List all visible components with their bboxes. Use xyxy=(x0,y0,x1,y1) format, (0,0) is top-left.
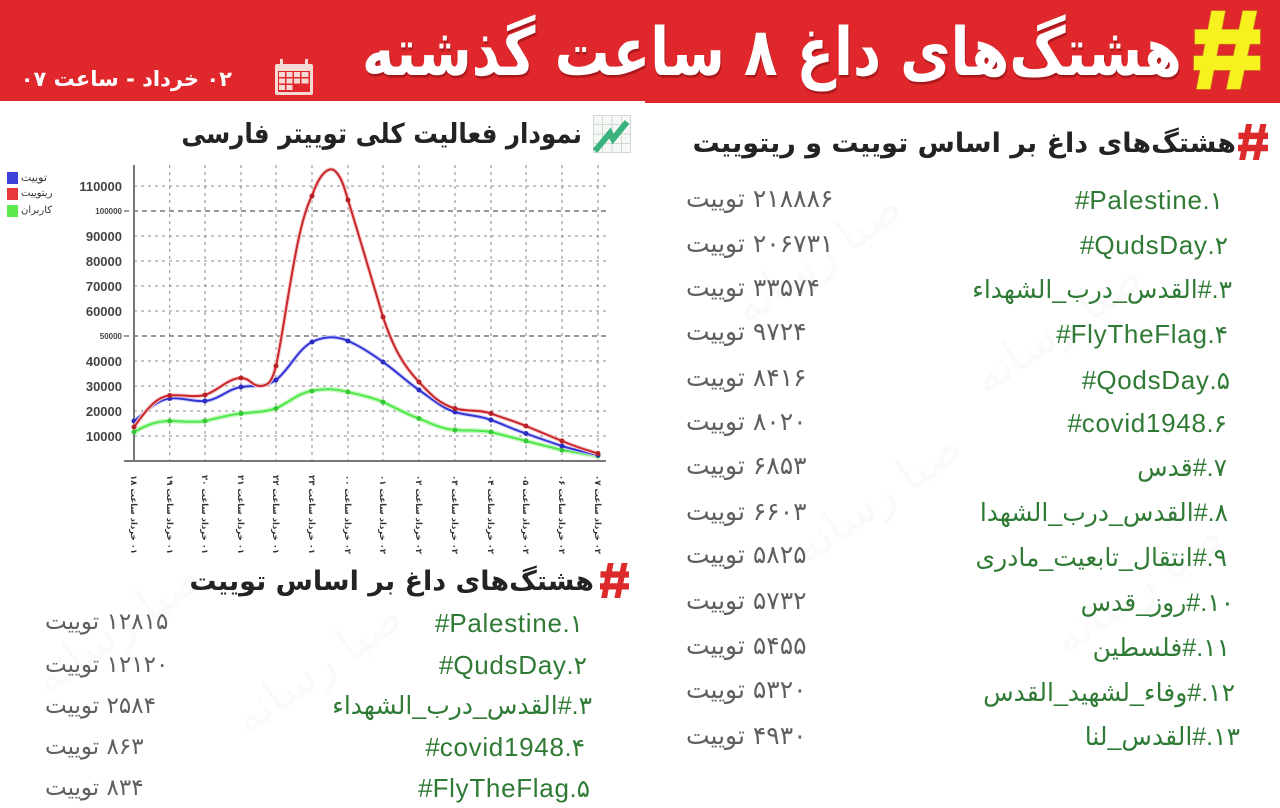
text: صبا رسانه xyxy=(962,249,1152,405)
y axis labels: 90000 xyxy=(86,229,122,244)
x axis labels: ۰۲ خرداد ساعت ۰۴ xyxy=(485,475,495,555)
row 7: ۷.#قدس xyxy=(1137,454,1227,482)
row 12: ۵۳۲۰ توییت xyxy=(686,675,807,704)
x axis labels: ۰۲ خرداد ساعت ۰۶ xyxy=(556,475,566,555)
row 6: ۶.#covid1948 xyxy=(1067,408,1227,438)
row 9: ۹.#انتقال_تابعیت_مادری xyxy=(976,544,1227,572)
row 5 xyxy=(686,363,1230,395)
x axis labels: ۰۱ خرداد ساعت ۲۳ xyxy=(306,475,316,554)
row 3 xyxy=(686,273,1232,304)
date and time: ۰۲ خرداد - ساعت ۰۷ xyxy=(21,67,232,91)
x axis labels: ۰۲ خرداد ساعت ۰۲ xyxy=(413,475,423,555)
row 1: ۱۲۸۱۵ توییت xyxy=(45,609,168,635)
x axis labels xyxy=(128,475,602,555)
y axis labels: 10000 xyxy=(86,429,122,444)
row 5: ۸۴۱۶ توییت xyxy=(686,363,807,392)
legend: retweet: ریتوییت xyxy=(21,188,52,199)
row 12: ۱۲.#وفاء_لشهید_القدس xyxy=(983,679,1235,707)
legend: users: کاربران xyxy=(21,205,52,216)
legend: tweet xyxy=(7,171,47,184)
panel: hashtags by tweet and retweet xyxy=(686,124,1268,751)
heading text: هشتگ‌های داغ بر اساس توییت و ریتوییت xyxy=(692,128,1236,159)
y axis labels: 80000 xyxy=(86,254,122,269)
row 1 xyxy=(686,184,1223,215)
heading with hash icon xyxy=(692,124,1268,160)
row 8: ۸.#القدس_درب_الشهدا xyxy=(980,499,1228,527)
text: صبا رسانه xyxy=(722,179,912,335)
heading text: هشتگ‌های داغ بر اساس توییت xyxy=(189,566,594,597)
x axis labels: ۰۱ خرداد ساعت ۱۹ xyxy=(164,475,174,554)
row 9 xyxy=(686,540,1227,572)
row 1: ۲۱۸۸۸۶ توییت xyxy=(686,184,833,213)
row 8 xyxy=(686,497,1228,528)
chart heading xyxy=(181,115,631,153)
row 4: ۴.#FlyTheFlag xyxy=(1056,319,1228,349)
row 5: ۸۳۴ توییت xyxy=(45,775,144,801)
text: صبا رسانه xyxy=(782,419,972,575)
x axis labels: ۰۱ خرداد ساعت ۲۱ xyxy=(235,475,245,554)
y axis labels: 70000 xyxy=(86,279,122,294)
y axis labels: 40000 xyxy=(86,354,122,369)
row 4: ۸۶۳ توییت xyxy=(45,734,144,760)
row 7: ۶۸۵۳ توییت xyxy=(686,451,807,480)
row 7 xyxy=(686,451,1227,482)
row 2: ۲۰۶۷۳۱ توییت xyxy=(686,229,833,258)
chart title: نمودار فعالیت کلی توییتر فارسی xyxy=(181,117,582,150)
x axis labels: ۰۲ خرداد ساعت ۰۵ xyxy=(520,475,530,555)
text: صبا رسانه xyxy=(22,549,212,705)
row 4 xyxy=(45,732,585,762)
row 2: ۲.#QudsDay xyxy=(1080,230,1228,260)
row 10: ۵۷۳۲ توییت xyxy=(686,586,807,615)
legend: users xyxy=(7,205,52,217)
text: صبا رسانه xyxy=(1042,509,1232,665)
x axis labels: ۰۱ خرداد ساعت ۱۸ xyxy=(128,475,138,554)
row 6: ۸۰۲۰ توییت xyxy=(686,407,807,436)
x axis labels: ۰۲ خرداد ساعت ۰۷ xyxy=(592,475,602,555)
row 3: ۲۵۸۴ توییت xyxy=(45,693,156,719)
row 13 xyxy=(686,721,1240,751)
y axis labels: 100000 xyxy=(95,207,123,216)
series: users (green) xyxy=(132,388,600,458)
series: tweets (blue) xyxy=(132,337,600,458)
row 2 xyxy=(686,229,1228,260)
legend xyxy=(7,171,52,217)
row 10: ۱۰.#روز_قدس xyxy=(1081,589,1234,617)
icon: yellow hash xyxy=(1193,10,1261,90)
row 2: ۱۲۱۲۰ توییت xyxy=(45,652,168,678)
row 5: ۵.#QodsDay xyxy=(1082,365,1230,395)
y axis labels xyxy=(79,179,123,444)
row 1: ۱.#Palestine xyxy=(1075,185,1223,215)
row 13: ۴۹۳۰ توییت xyxy=(686,721,807,750)
icon: calendar xyxy=(275,59,313,95)
icon: red hash xyxy=(600,563,629,598)
header banner xyxy=(0,0,1280,103)
y axis labels: 50000 xyxy=(100,332,123,341)
legend: tweet: توییت xyxy=(21,171,47,184)
row 6 xyxy=(686,407,1227,438)
row 2 xyxy=(45,650,587,680)
x axis labels: ۰۱ خرداد ساعت ۲۰ xyxy=(199,475,209,554)
x axis labels: ۰۱ خرداد ساعت ۲۲ xyxy=(270,475,280,554)
row 1: ۱.#Palestine xyxy=(435,608,583,638)
icon: rising chart xyxy=(593,115,631,153)
row 1 xyxy=(45,608,583,638)
row 5 xyxy=(45,773,590,803)
row 8: ۶۶۰۳ توییت xyxy=(686,497,807,526)
x axis labels: ۰۲ خرداد ساعت ۰۳ xyxy=(449,475,459,555)
row 5: ۵.#FlyTheFlag xyxy=(418,773,590,803)
row 3: ۳.#القدس_درب_الشهداء xyxy=(332,692,592,720)
x axis labels: ۰۲ خرداد ساعت ۰۰ xyxy=(342,475,352,555)
text: صبا رسانه xyxy=(222,589,412,745)
row 10 xyxy=(686,586,1234,618)
row 3: ۳.#القدس_درب_الشهداء xyxy=(972,276,1232,304)
legend: retweet xyxy=(7,188,52,200)
row 4 xyxy=(686,317,1228,349)
y axis labels: 60000 xyxy=(86,304,122,319)
line chart xyxy=(79,165,606,555)
y axis labels: 20000 xyxy=(86,404,122,419)
y axis labels: 30000 xyxy=(86,379,122,394)
row 9: ۵۸۲۵ توییت xyxy=(686,540,807,569)
row 4: ۴.#covid1948 xyxy=(425,732,585,762)
row 4: ۹۷۲۴ توییت xyxy=(686,317,807,346)
row 12 xyxy=(686,675,1235,708)
row 3: ۳۳۵۷۴ توییت xyxy=(686,273,820,302)
row 11: ۱۱.#فلسطین xyxy=(1093,634,1230,662)
row 2: ۲.#QudsDay xyxy=(439,650,587,680)
row 11: ۵۴۵۵ توییت xyxy=(686,631,807,660)
row 11 xyxy=(686,631,1230,662)
heading with hash icon xyxy=(189,563,629,598)
row 13: ۱۳.#القدس_لنا xyxy=(1085,723,1240,751)
row 3 xyxy=(45,692,592,720)
icon: red hash xyxy=(1238,124,1268,160)
main title: هشتگ‌های داغ ۸ ساعت گذشته xyxy=(362,13,1182,91)
series: retweets (red) xyxy=(132,169,600,456)
x axis labels: ۰۲ خرداد ساعت ۰۱ xyxy=(377,475,387,555)
panel: hashtags by tweet xyxy=(45,563,629,803)
y axis labels: 110000 xyxy=(79,179,122,194)
